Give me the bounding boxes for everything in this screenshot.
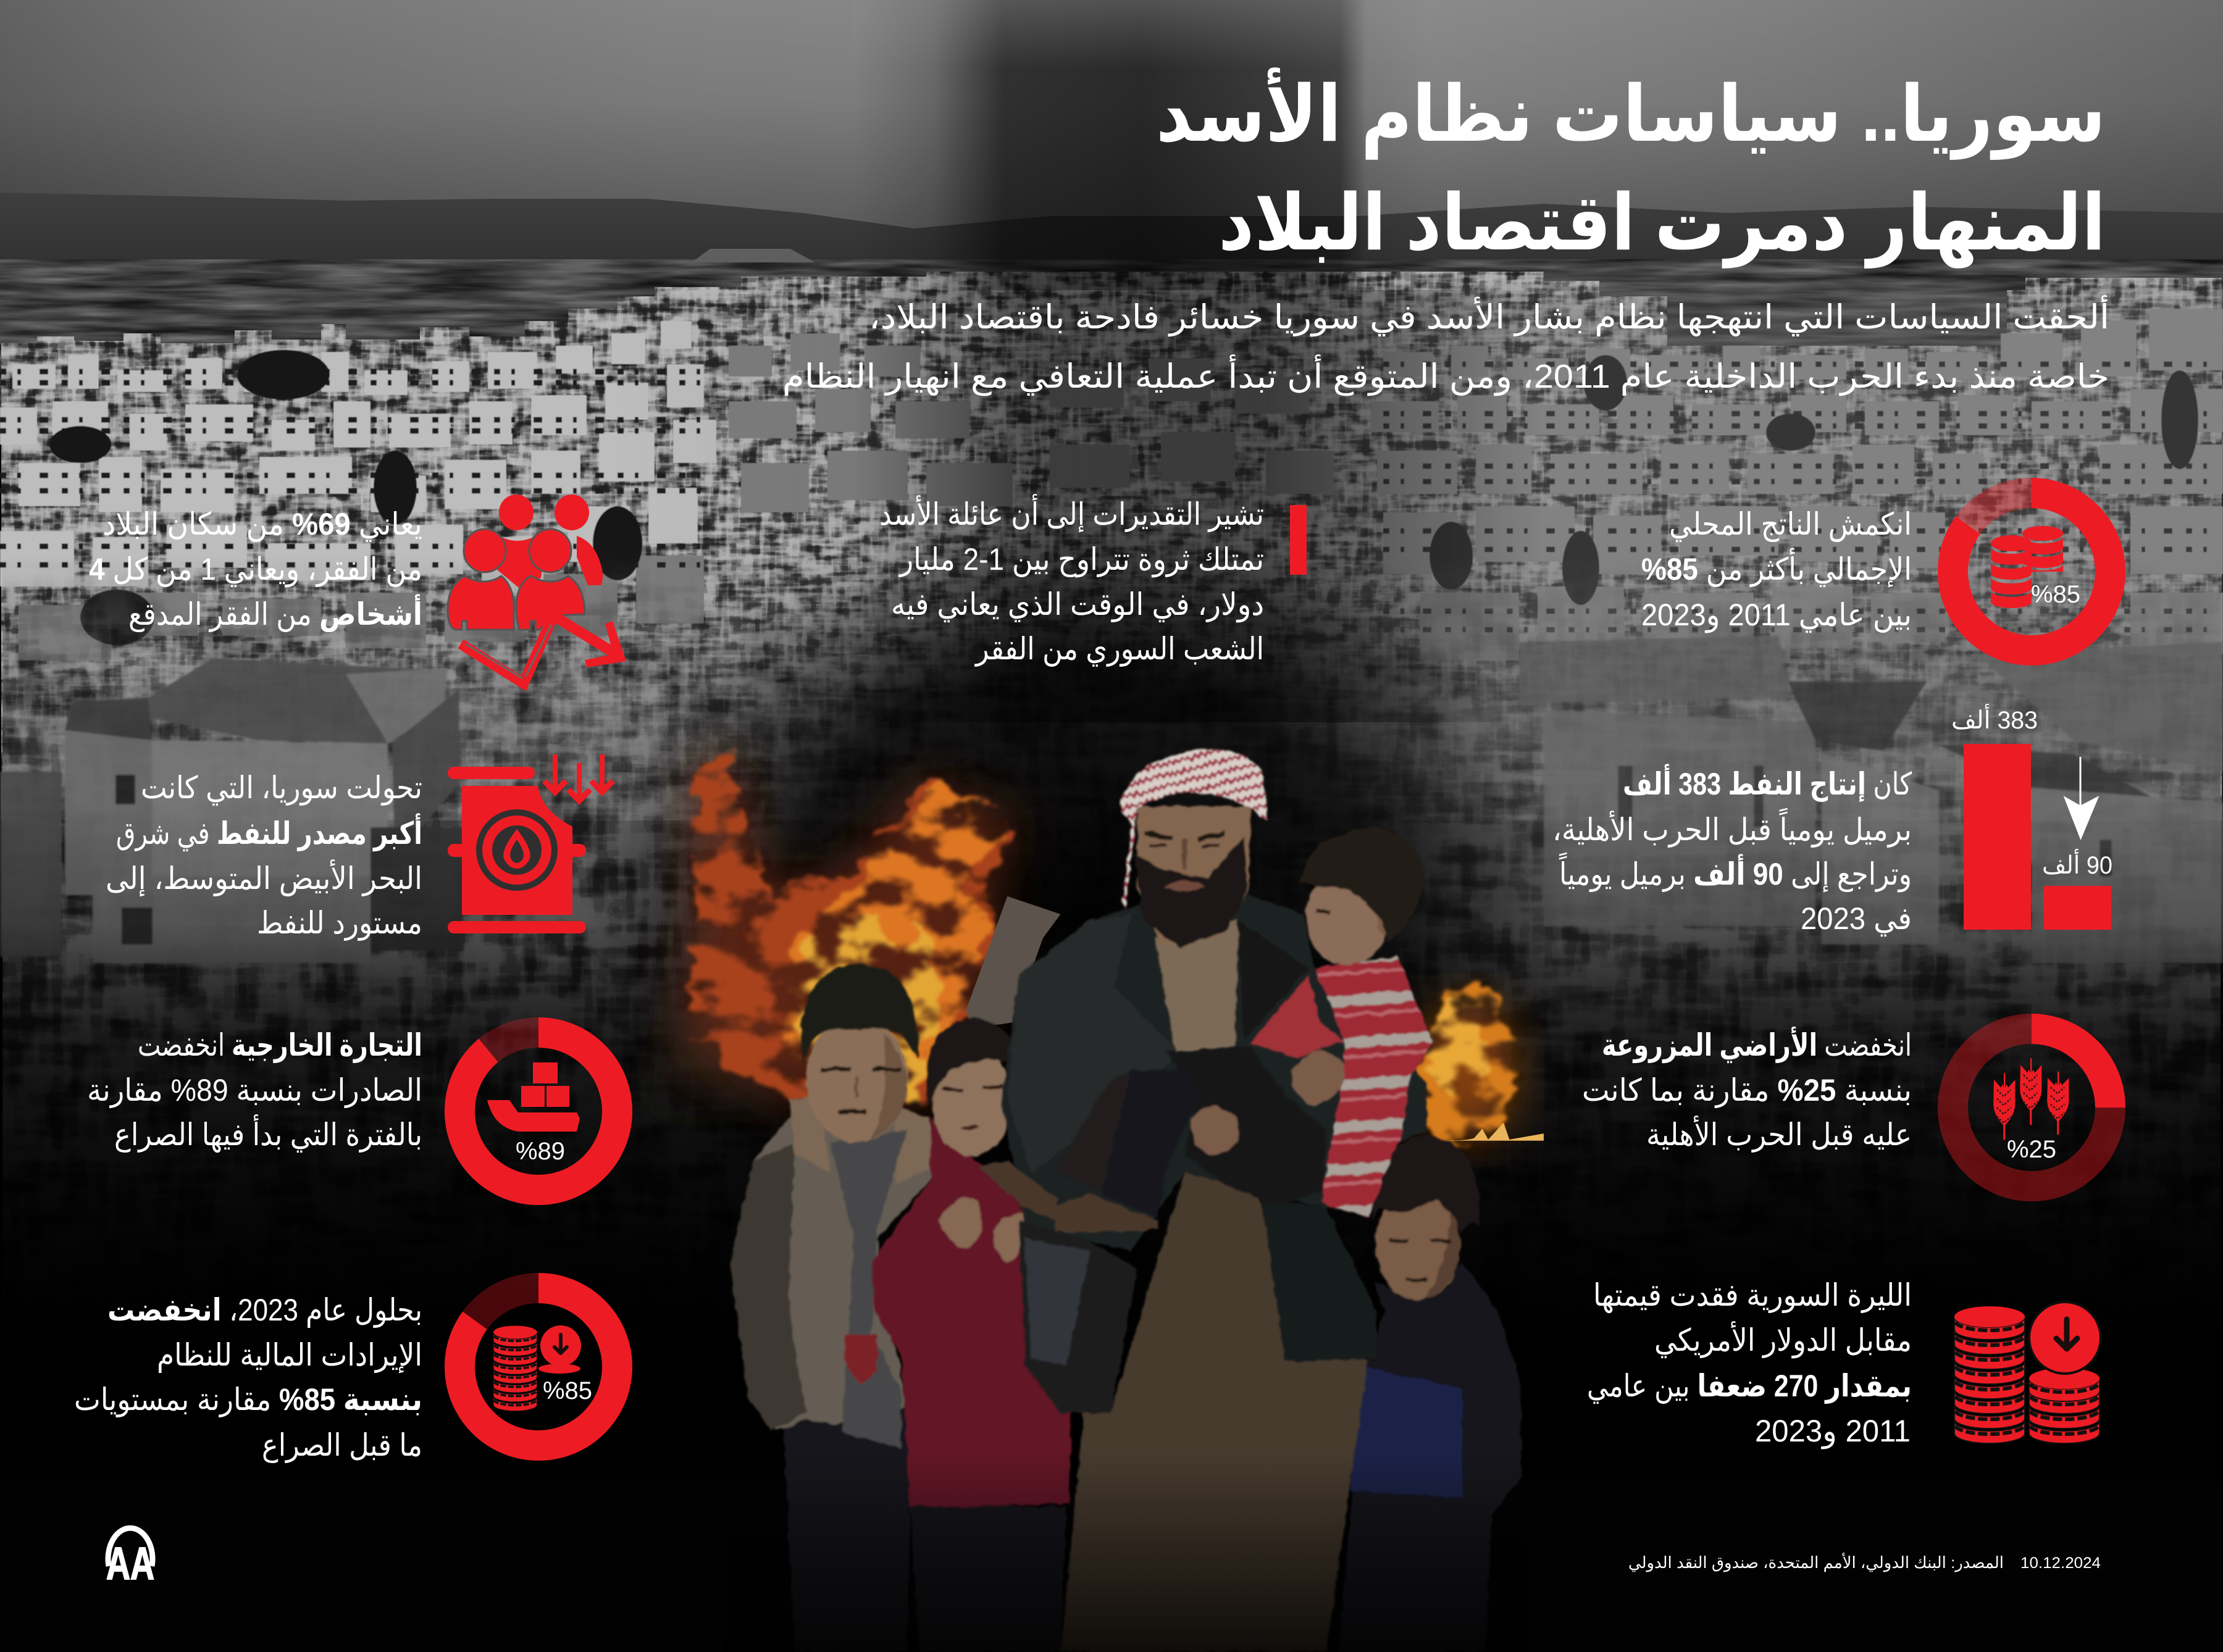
man head bbox=[1137, 806, 1250, 945]
text: family wealth bbox=[879, 494, 1264, 667]
panel: oil output bbox=[1552, 704, 2112, 937]
text: oil importer: أكبر مصدر للنفط في شرق bbox=[116, 813, 422, 852]
text: trade: الصادرات بنسبة 89% مقارنة bbox=[87, 1073, 422, 1108]
text: farmland: بنسبة 25% مقارنة بما كانت bbox=[1582, 1073, 1912, 1108]
panel: revenue bbox=[74, 1288, 617, 1463]
text: poverty: أشخاص من الفقر المدقع bbox=[128, 594, 422, 633]
background: mountains bbox=[0, 193, 2223, 296]
text: GDP: بين عامي 2011 و2023 bbox=[1641, 598, 1912, 633]
fire right bbox=[1418, 992, 1544, 1148]
background: distant city bbox=[0, 265, 2223, 821]
intro text bbox=[782, 295, 2109, 396]
right boy bbox=[1338, 1135, 1522, 1652]
donut: farmland 25 percent bbox=[1953, 1028, 2111, 1187]
arrow: decline bbox=[2064, 757, 2100, 840]
intro text: خاصة منذ بدء الحرب الداخلية عام 2011، ومن المتوقع أن تبدأ عملية التعافي مع انهيار النظام bbox=[782, 354, 2109, 396]
label: 90 thousand: 90 ألف bbox=[2042, 849, 2112, 879]
donut: GDP 85 percent bbox=[1953, 493, 2111, 651]
text: lira bbox=[1587, 1278, 1912, 1450]
burnt wreck bbox=[966, 896, 1060, 1028]
panel: farmland bbox=[1582, 1026, 2111, 1187]
text: trade: التجارة الخارجية انخفضت bbox=[138, 1028, 422, 1063]
text: oil output: برميل يومياً قبل الحرب الأهلية، bbox=[1552, 807, 1912, 848]
text: oil importer: مستورد للنفط bbox=[257, 906, 422, 941]
text: lira: مقابل الدولار الأمريكي bbox=[1654, 1321, 1912, 1359]
background: smoke darkening centre bbox=[587, 519, 1575, 1309]
text: lira: الليرة السورية فقدت قيمتها bbox=[1593, 1278, 1912, 1314]
source and date: المصدر: البنك الدولي، الأمم المتحدة، صندوق النقد الدولي bbox=[1628, 1552, 2004, 1572]
man bbox=[1002, 749, 1427, 1652]
panel: trade bbox=[87, 1028, 618, 1190]
label: 383 thousand: 383 ألف bbox=[1951, 704, 2038, 734]
panel: oil importer bbox=[106, 754, 615, 941]
background: sky bbox=[0, 0, 2223, 290]
trees bbox=[49, 350, 2198, 645]
label: 25 percent: %25 bbox=[2007, 1136, 2056, 1163]
donut: exports 89 percent bbox=[459, 1032, 618, 1190]
text: GDP: الإجمالي بأكثر من 85% bbox=[1641, 548, 1912, 587]
background: near buildings right bbox=[1519, 636, 2223, 963]
bar chart: oil production bbox=[1964, 744, 2111, 930]
logo: AA: AA bbox=[106, 1538, 154, 1589]
icon: oil barrel bbox=[448, 754, 615, 933]
icon: coins and down arrow bbox=[493, 1325, 581, 1411]
donut: revenue 85 percent bbox=[459, 1288, 618, 1446]
text: lira: 2011 و2023 bbox=[1755, 1414, 1911, 1450]
label: 85 percent: %85 bbox=[543, 1377, 592, 1404]
text: GDP bbox=[1641, 507, 1912, 633]
source and date: 10.12.2024 bbox=[2020, 1554, 2101, 1572]
left boy bbox=[730, 964, 937, 1652]
title: سوريا.. سياسات نظام الأسد bbox=[1156, 67, 2106, 160]
background: haze flattening right side bbox=[808, 281, 2223, 940]
text: farmland: انخفضت الأراضي المزروعة bbox=[1602, 1026, 1912, 1064]
text: family wealth: دولار، في الوقت الذي يعاني فيه bbox=[891, 587, 1264, 623]
text: poverty bbox=[89, 507, 422, 633]
panel: GDP bbox=[1641, 493, 2111, 651]
text: oil output: في 2023 bbox=[1801, 901, 1912, 937]
panel: poverty bbox=[89, 494, 626, 683]
icon: wheat bbox=[1993, 1058, 2069, 1140]
icon: coins bbox=[1991, 526, 2063, 608]
text: oil importer: البحر الأبيض المتوسط، إلى bbox=[106, 859, 422, 897]
text: revenue: بنسبة 85% مقارنة بمستويات bbox=[74, 1382, 422, 1417]
background: nearer city bbox=[2, 567, 2221, 1199]
text: oil output: كان إنتاج النفط 383 ألف bbox=[1623, 764, 1912, 803]
text: farmland: عليه قبل الحرب الأهلية bbox=[1646, 1116, 1912, 1153]
middle child bbox=[871, 1019, 1073, 1652]
text: oil output: وتراجع إلى 90 ألف برميل يومياً bbox=[1559, 852, 1912, 893]
background: smoke column bbox=[852, 0, 1544, 722]
fire left bbox=[653, 752, 1019, 1101]
text: oil importer bbox=[106, 770, 422, 941]
text: lira: بمقدار 270 ضعفا بين عامي bbox=[1587, 1369, 1912, 1404]
background: plain bbox=[0, 249, 2223, 444]
icon: coin stacks bbox=[1954, 1301, 2102, 1443]
man robe bbox=[1060, 1172, 1368, 1652]
text: family wealth: الشعب السوري من الفقر bbox=[974, 632, 1264, 667]
accent bar bbox=[1290, 505, 1307, 575]
panel: family wealth bbox=[879, 494, 1307, 667]
house windows bbox=[0, 364, 2223, 630]
text: oil importer: تحولت سوريا، التي كانت bbox=[141, 770, 422, 806]
man coat bbox=[1002, 890, 1427, 1251]
background: bottom fade bbox=[0, 803, 2223, 1482]
icon: people with falling arrow bbox=[448, 494, 626, 683]
label: 85 percent: %85 bbox=[2031, 581, 2080, 608]
text: trade: بالفترة التي بدأ فيها الصراع bbox=[114, 1114, 422, 1153]
text: farmland bbox=[1582, 1026, 1912, 1153]
text: poverty: يعاني 69% من سكان البلاد bbox=[103, 507, 422, 542]
text: trade bbox=[87, 1028, 422, 1153]
text: revenue bbox=[74, 1293, 422, 1463]
label: 89 percent: %89 bbox=[516, 1138, 565, 1165]
text: poverty: من الفقر، ويعاني 1 من كل 4 bbox=[89, 552, 422, 588]
icon: cargo ship bbox=[487, 1062, 580, 1132]
text: revenue: ما قبل الصراع bbox=[262, 1428, 422, 1463]
background: near buildings left bbox=[0, 658, 463, 963]
intro text: ألحقت السياسات التي انتهجها نظام بشار الأسد في سوريا خسائر فادحة باقتصاد البلاد، bbox=[869, 295, 2109, 336]
text: family wealth: تمتلك ثروة تتراوح بين 1-2 مليار bbox=[898, 542, 1264, 578]
panel: lira bbox=[1587, 1278, 2102, 1450]
text: oil output bbox=[1552, 764, 1912, 937]
text: GDP: انكمش الناتج المحلي bbox=[1669, 507, 1912, 543]
title bbox=[1156, 67, 2106, 269]
logo: AA bbox=[106, 1528, 154, 1589]
fade bottom of figures bbox=[724, 1449, 1527, 1652]
text: revenue: الإيرادات المالية للنظام bbox=[157, 1338, 422, 1373]
text: family wealth: تشير التقديرات إلى أن عائلة الأسد bbox=[879, 494, 1264, 533]
photo: family and fire bbox=[653, 749, 1544, 1652]
background: house blocks bbox=[0, 309, 2223, 661]
text: revenue: بحلول عام 2023، انخفضت bbox=[107, 1293, 422, 1328]
title: المنهار دمرت اقتصاد البلاد bbox=[1218, 179, 2106, 269]
carried child bbox=[978, 827, 1433, 1233]
